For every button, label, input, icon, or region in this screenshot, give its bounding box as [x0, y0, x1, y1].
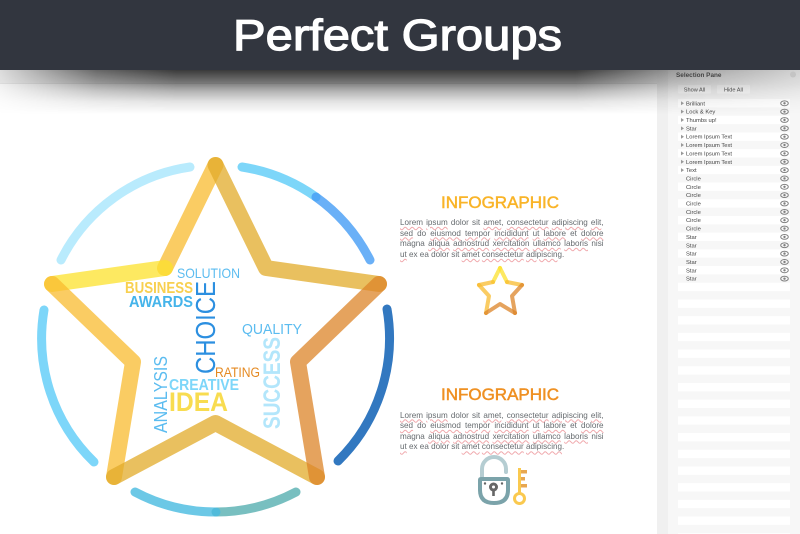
list labels: Star	[686, 268, 697, 274]
list labels: Thumbs up!	[686, 118, 717, 124]
list labels: Star	[686, 126, 697, 132]
word: solution: SOLUTION	[177, 265, 240, 281]
list labels: Star	[686, 243, 697, 249]
star piece: top right	[216, 165, 379, 284]
list labels: Lock & Key	[686, 110, 715, 116]
star piece: top left	[165, 165, 216, 268]
star piece: right	[298, 284, 379, 477]
title bar	[0, 0, 800, 70]
slide background	[0, 70, 657, 534]
list labels: Brilliant	[686, 101, 705, 107]
lock shackle	[482, 457, 506, 478]
list labels: Circle	[686, 185, 701, 191]
icon: small star	[479, 268, 522, 313]
selection pane	[657, 70, 800, 534]
word: awards: AWARDS	[129, 294, 193, 311]
show all button: Show All	[684, 87, 705, 93]
circle of arc segments	[42, 167, 390, 512]
star piece: upper left yellow	[52, 268, 165, 284]
pane labels	[676, 72, 796, 283]
arc: top right blue	[316, 197, 370, 260]
text block 1: sed do eiusmod tempor incididunt ut labore et dolore	[400, 229, 604, 238]
visibility eye icons	[781, 101, 788, 281]
list labels	[686, 101, 732, 283]
keyhole	[489, 482, 498, 492]
list labels: Circle	[686, 202, 701, 208]
word: analysis: ANALYSIS	[151, 356, 171, 433]
text block 2: ut ex ea dolor sit amet consectetur adipiscing.	[400, 442, 564, 451]
word: idea: IDEA	[169, 387, 228, 417]
word: business: BUSINESS	[125, 280, 193, 297]
arc: left	[42, 310, 94, 462]
arc: right dark blue	[338, 309, 390, 461]
text block 1: ut ex ea dolor sit amet consectetur adipiscing.	[400, 250, 564, 259]
list stripes	[678, 99, 790, 534]
list labels: Lorem Ipsum Text	[686, 151, 732, 157]
list labels: Text	[686, 168, 697, 174]
list labels: Star	[686, 252, 697, 258]
list expand arrows	[681, 101, 684, 172]
pane close button	[790, 72, 796, 78]
text block 1	[400, 218, 604, 262]
list labels: Star	[686, 235, 697, 241]
list labels: Star	[686, 260, 697, 266]
heading: infographic 2: INFOGRAPHIC	[441, 385, 559, 404]
list labels: Circle	[686, 218, 701, 224]
pane title: Selection Pane	[676, 72, 722, 79]
text block 2: sed do eiusmod tempor incididunt ut labore et dolore	[400, 421, 604, 430]
lock body	[478, 477, 510, 505]
text block 1: magna aliqua adnostrud xercitation ullamco laboris nisi	[400, 239, 604, 248]
list labels: Lorem Ipsum Text	[686, 143, 732, 149]
header shadow	[0, 70, 800, 114]
list labels: Circle	[686, 176, 701, 182]
word: choice: CHOICE	[190, 281, 221, 374]
arc: bottom blue	[135, 492, 216, 512]
text block 2	[400, 410, 604, 455]
list labels: Lorem Ipsum Text	[686, 135, 732, 141]
word: quality: QUALITY	[242, 322, 302, 338]
list labels: Circle	[686, 227, 701, 233]
list labels: Circle	[686, 210, 701, 216]
text block 1: Lorem ipsum dolor sit amet, consectetur adipiscing elit,	[400, 218, 604, 227]
star piece: bottom	[114, 423, 317, 477]
text block 2: Lorem ipsum dolor sit amet, consectetur adipiscing elit,	[400, 410, 604, 420]
word cloud	[125, 265, 302, 433]
arc: top right light	[242, 167, 316, 197]
list labels: Star	[686, 277, 697, 283]
large star outline	[52, 165, 379, 477]
heading: infographic 1: INFOGRAPHIC	[441, 193, 559, 212]
star piece: left	[52, 284, 133, 477]
title: Perfect Groups	[233, 11, 562, 60]
word: creative: CREATIVE	[169, 377, 239, 394]
text block 2: magna aliqua adnostrud xercitation ullamco laboris nisi	[400, 432, 604, 441]
key	[514, 494, 524, 504]
list labels: Circle	[686, 193, 701, 199]
word: success: SUCCESS	[259, 337, 286, 429]
list labels: Lorem Ipsum Text	[686, 160, 732, 166]
word: rating: RATING	[215, 365, 260, 380]
arc: bottom teal	[216, 492, 296, 512]
arc: top left	[61, 167, 190, 260]
show all button	[678, 85, 711, 94]
hide all button	[717, 85, 750, 94]
icon: lock and key	[478, 457, 527, 505]
hide all button: Hide All	[724, 87, 743, 93]
